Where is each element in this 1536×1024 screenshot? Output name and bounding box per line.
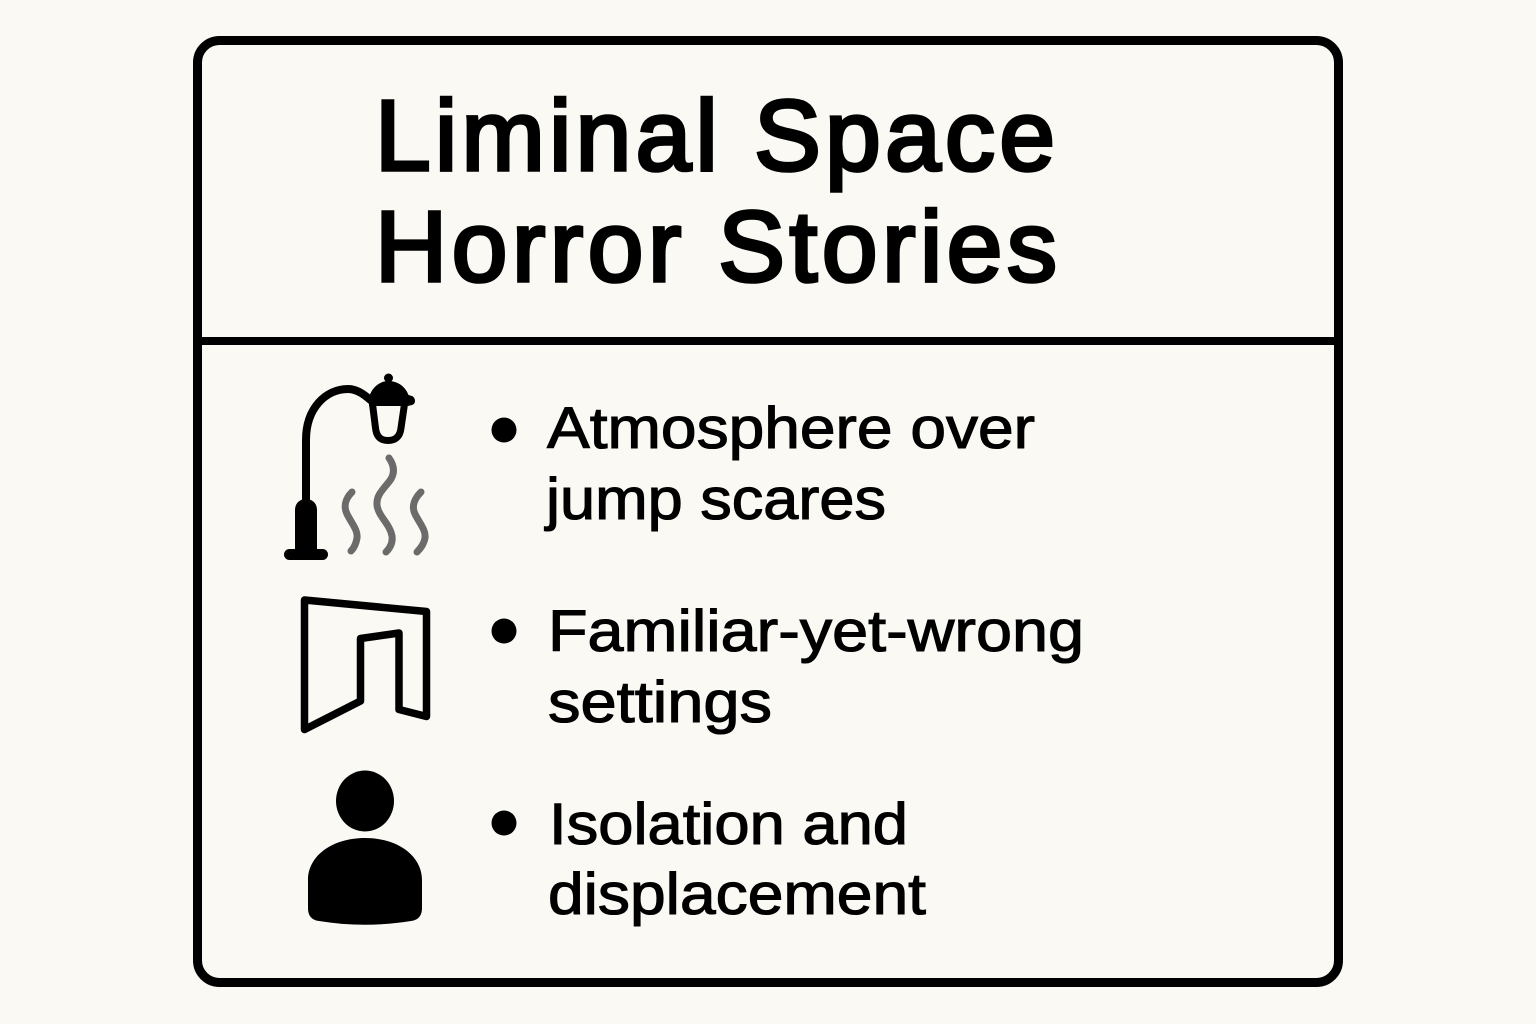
title: Horror Stories <box>375 191 1057 303</box>
bullet: familiar-yet-wrong settings <box>492 599 1084 735</box>
bullet: isolation and displacement: Isolation and <box>549 792 908 857</box>
bullet: atmosphere over jump scares: jump scares <box>544 467 886 532</box>
bullet: atmosphere over jump scares: Atmosphere over <box>547 396 1035 461</box>
icon: street lamp with mist <box>284 374 425 560</box>
bullet: familiar-yet-wrong settings: Familiar-yet-wrong <box>548 599 1084 664</box>
title <box>375 80 1057 303</box>
icon: lone person <box>308 770 422 925</box>
bullet: isolation and displacement: displacement <box>548 862 926 927</box>
bullet: atmosphere over jump scares <box>492 396 1035 532</box>
title: Liminal Space <box>375 80 1055 192</box>
bullet: isolation and displacement <box>492 792 926 927</box>
panel: main frame <box>198 40 1338 982</box>
icon: warped doorway <box>304 600 426 730</box>
bullet: familiar-yet-wrong settings: settings <box>548 670 772 735</box>
